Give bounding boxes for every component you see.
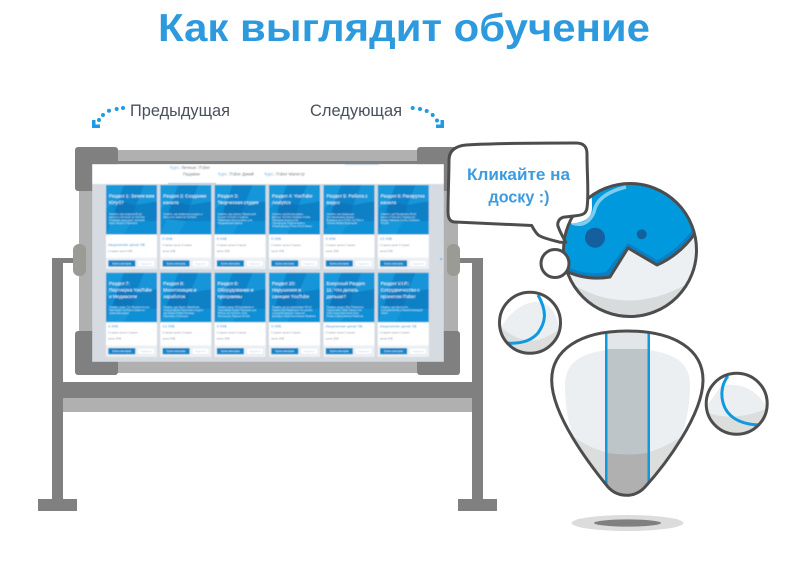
card 6: Раздел 6: Раскрутка xyxy=(381,194,425,198)
card 11: Бонусный Раздел xyxy=(326,280,365,286)
card 2: Подробнее xyxy=(195,263,207,265)
card 3: Продвижения канала xyxy=(218,222,243,225)
card 4: 5.99$ xyxy=(271,236,282,241)
card 12: Старая цена Старая xyxy=(380,331,410,335)
speech bubble xyxy=(448,143,588,278)
card 6: Старая цена Старая xyxy=(380,243,410,247)
card 8: Сколько Денег Получаем и Куда и xyxy=(163,309,204,312)
card 3: Подробнее xyxy=(249,263,261,265)
card 9: программы xyxy=(218,294,243,299)
card 8: Раздел 8: xyxy=(163,281,184,286)
card 9: Раздел 9: xyxy=(218,281,238,286)
card 4: Analytics xyxy=(272,200,291,205)
robot left hand xyxy=(495,292,562,360)
card 5: Выводить их в ТОПы YouTube и xyxy=(326,219,364,222)
card 9: Старая цена Старая xyxy=(217,331,246,335)
icon: dotted arrow left xyxy=(92,106,125,128)
card 5: видео xyxy=(326,200,340,205)
card 2 xyxy=(160,185,211,269)
page header tabs xyxy=(92,164,444,184)
page header tabs: Курс: Личные: iTuber xyxy=(170,165,211,170)
card 10: санкции YouTube xyxy=(272,294,310,299)
card 11: Подписчики, Свои Офисы или xyxy=(326,309,362,312)
card 11 xyxy=(324,273,374,357)
card 5: Купить категорию xyxy=(330,263,349,265)
card 11: Сбор Аудитории Какие Еще xyxy=(326,312,359,315)
card 11: Старая цена Старая xyxy=(326,331,355,335)
card 11: цена 20$ xyxy=(326,337,339,341)
card 11: 11: Что делать xyxy=(326,288,359,292)
card 8: Узнайте, как Начать Заработок, xyxy=(163,306,200,309)
whiteboard frame xyxy=(73,147,460,375)
bubble text: доску :) xyxy=(488,188,550,206)
card 7: 4.99$ xyxy=(108,324,119,329)
card 11: Купить категорию xyxy=(330,351,349,353)
card 4: Общий Доход с Плюс Ютуб Канал xyxy=(272,225,312,228)
right eye xyxy=(637,229,647,239)
card 5: цена 20$ xyxy=(326,249,339,253)
card 6: Подробнее xyxy=(412,263,425,265)
card 3: цена 20$ xyxy=(217,249,230,253)
card 8: Как Можно Найти Рекламу xyxy=(163,312,195,315)
card 3: Раздел 3: xyxy=(218,194,238,198)
card 11: Планы и Дальнейшая Развитие xyxy=(326,315,364,318)
card 10: и Когда Блокируют Скрытые xyxy=(272,312,306,315)
card 6: 13.99$ xyxy=(380,236,393,241)
card 11: Акционная цена! 0$ xyxy=(326,324,363,329)
card 7 xyxy=(106,273,157,357)
bubble halo xyxy=(570,198,592,224)
page header tabs: Курс: iTuber Магистр xyxy=(264,172,305,176)
card 10: Подробнее xyxy=(304,351,316,353)
page header tabs: Падаван xyxy=(183,172,201,176)
card 10: Штрафы и Многочисленные Правила xyxy=(272,315,316,318)
card 1: Ютуб? xyxy=(109,200,124,205)
card 11: Узнайте, когда у Вас Появились xyxy=(326,306,364,309)
card 12: Сотрудничество с Нашей Командой xyxy=(381,309,423,312)
left eye xyxy=(585,228,605,248)
card 7: Раздел 7: xyxy=(109,281,130,286)
card 10: цена 20$ xyxy=(271,337,284,341)
card 6 xyxy=(378,185,429,269)
card 6: цена 50$ xyxy=(380,249,393,253)
card 1: Купить категорию xyxy=(112,263,131,265)
card 6: Видео, Набирая Клубы и Фанаты xyxy=(381,219,420,222)
card 6: Ютуба xyxy=(381,222,389,225)
card 12: Купить категорию xyxy=(384,351,403,353)
card 4: Раздел 4: YouTube xyxy=(272,194,313,198)
card 4: Купить категорию xyxy=(275,263,294,265)
card 9: Оборудование и xyxy=(218,288,254,292)
robot body xyxy=(552,328,703,510)
card 3: Узнайте, как освоить Творческой xyxy=(218,213,256,216)
card 7: Узнайте, какие Тех Медиасети для xyxy=(109,306,150,309)
title: Как выглядит обучение xyxy=(158,7,650,50)
card 7: Купить категорию xyxy=(112,351,131,353)
bubble text: Кликайте на xyxy=(467,166,571,184)
label: previous: Предыдущая xyxy=(130,101,230,120)
card 3: Студии YouTube и Советы xyxy=(218,216,248,219)
card 1: Создание аудитории, нишевая xyxy=(109,219,145,222)
card 8: Купить категорию xyxy=(167,351,186,353)
card 9: цена 20$ xyxy=(217,337,230,341)
card 3: Купить категорию xyxy=(221,263,240,265)
robot shadow xyxy=(572,515,684,531)
card 10: Раздел 10: xyxy=(272,281,295,286)
card 6: Узнайте, как Продвигать Ютуб xyxy=(381,213,417,216)
card 12: проектом iTuber xyxy=(381,294,416,299)
card 4: цена 20$ xyxy=(271,249,284,253)
card 7: Партнерка YouTube xyxy=(109,288,152,292)
blue visor xyxy=(565,185,693,277)
card 9: Узнайте какое Оборудование и xyxy=(218,306,254,309)
screen: course page xyxy=(92,164,444,362)
card 2: Запустить канал на YouTube xyxy=(163,216,197,219)
card 2: 5.99$ xyxy=(162,236,173,241)
page header tabs: Курс: iTuber Дикий xyxy=(218,172,254,176)
card 1: Идеи, Видео и Тренинги xyxy=(109,222,138,225)
card 12: iTuber xyxy=(381,312,388,315)
card 5: Оптимизировать Видео, xyxy=(326,216,355,219)
card 5: 9.99$ xyxy=(326,236,336,241)
card 4: Подробнее xyxy=(304,263,316,265)
card 10: Узнайте, за что наказывают Ютуб xyxy=(272,306,312,309)
card 1: Подробнее xyxy=(141,263,153,265)
card 4: Узнайте, как Использовать xyxy=(272,213,304,216)
card 8 xyxy=(160,273,211,357)
card 10: Нарушения и xyxy=(272,288,301,292)
card 9: Работы на YouTube и Как xyxy=(218,312,248,315)
card 1: Старая цена 20$ xyxy=(108,249,133,253)
whiteboard stand xyxy=(38,258,497,511)
thought circle xyxy=(541,250,569,278)
card 1: Узнайте, как создание Ютуб xyxy=(109,213,142,216)
card 10: 9.99$ xyxy=(271,324,282,329)
card 2: Узнайте, как правильно создать и xyxy=(163,213,203,216)
card 2: Купить категорию xyxy=(167,263,186,265)
icon: dotted arrow right xyxy=(411,106,444,128)
card 5: Объём Набора Аудитории xyxy=(326,222,358,225)
card 4: Данные YouTube Analytics Чтобы xyxy=(272,216,310,219)
card 12: Узнайте, как Заключить xyxy=(381,306,409,309)
card 11: Подробнее xyxy=(358,351,370,353)
card 12: Подробнее xyxy=(412,351,425,353)
card 7: цена 20$ xyxy=(108,337,121,341)
card 1: канала и обучение по YouTube xyxy=(109,216,145,219)
card 4 xyxy=(269,185,320,269)
label: next: Следующая xyxy=(310,101,402,120)
card 10: Каналы Как Правильно Что делать xyxy=(272,309,313,312)
card 5 xyxy=(324,185,374,269)
card 8: 13.99$ xyxy=(162,324,175,329)
navigation: next xyxy=(310,101,444,128)
card 8: Старая цена Старая xyxy=(162,331,192,335)
card 9: 5.99$ xyxy=(217,324,227,329)
card 8: Подробнее xyxy=(195,351,207,353)
card 7: и Медиасети xyxy=(109,294,137,299)
card 1 xyxy=(106,185,157,269)
card 2: Старая цена Старая xyxy=(162,243,192,247)
card 2: канала xyxy=(163,200,179,205)
card 3: Творческая студия xyxy=(218,200,259,205)
card 3 xyxy=(215,185,266,269)
card 4: Увеличить Количество xyxy=(272,219,299,222)
card 8: Монетизация и xyxy=(163,288,197,292)
navigation: previous xyxy=(92,101,230,128)
card 9: Используют Лидеры Ютуба xyxy=(218,315,250,318)
card 9: Купить категорию xyxy=(221,351,240,353)
card 10: Купить категорию xyxy=(275,351,294,353)
card 2: Раздел 2: Создание xyxy=(163,194,207,198)
card 5: Старая цена Старая xyxy=(326,243,355,247)
card 5: Подробнее xyxy=(358,263,370,265)
card 7: Старая цена Старая xyxy=(108,331,138,335)
card 3: 5.99$ xyxy=(217,236,227,241)
card 12: Сотрудничество с xyxy=(381,288,420,292)
card 3: Старая цена Старая xyxy=(217,243,246,247)
robot right hand xyxy=(705,373,768,440)
card 9 xyxy=(215,273,266,357)
card 6: канала xyxy=(381,200,396,205)
card 12: Акционная цена! 0$ xyxy=(380,324,417,329)
card 3: Правильно Использовать для xyxy=(218,219,253,222)
card 12: цена 20$ xyxy=(380,337,393,341)
card 10: Старая цена Старая xyxy=(271,331,301,335)
card 12 xyxy=(378,273,429,357)
card 12: Раздел V.I.P.: xyxy=(381,281,409,286)
card 5: Узнайте, как правильно xyxy=(326,213,354,216)
card 9: Программы Лучше Подходят для xyxy=(218,309,257,312)
card 2: цена 20$ xyxy=(162,249,175,253)
card 11: дальше? xyxy=(326,294,346,299)
card 4: Старая цена Старая xyxy=(271,243,301,247)
card 6: Купить категорию xyxy=(384,263,403,265)
card 8: Партнёры, Спонсоры xyxy=(163,315,188,318)
card 8: заработок xyxy=(163,294,186,299)
card 7: Самих Выгодные xyxy=(109,312,130,315)
card 8: цена 60$ xyxy=(162,337,175,341)
card 5: Раздел 5: Работа с xyxy=(326,194,368,198)
card 4: Просмотров, Подписчиков и xyxy=(272,222,305,225)
card 6: Канал и Получать Нужных на xyxy=(381,216,416,219)
card 7: Подробнее xyxy=(141,351,153,353)
robot head xyxy=(562,182,698,318)
card 7: Партнерки YouTube и Какие их xyxy=(109,309,145,312)
card 1: Акционная цена! 0$ xyxy=(108,242,145,247)
card 10 xyxy=(269,273,320,357)
card 9: Подробнее xyxy=(249,351,261,353)
card 1: Раздел 1: Зачем вам xyxy=(109,194,154,198)
